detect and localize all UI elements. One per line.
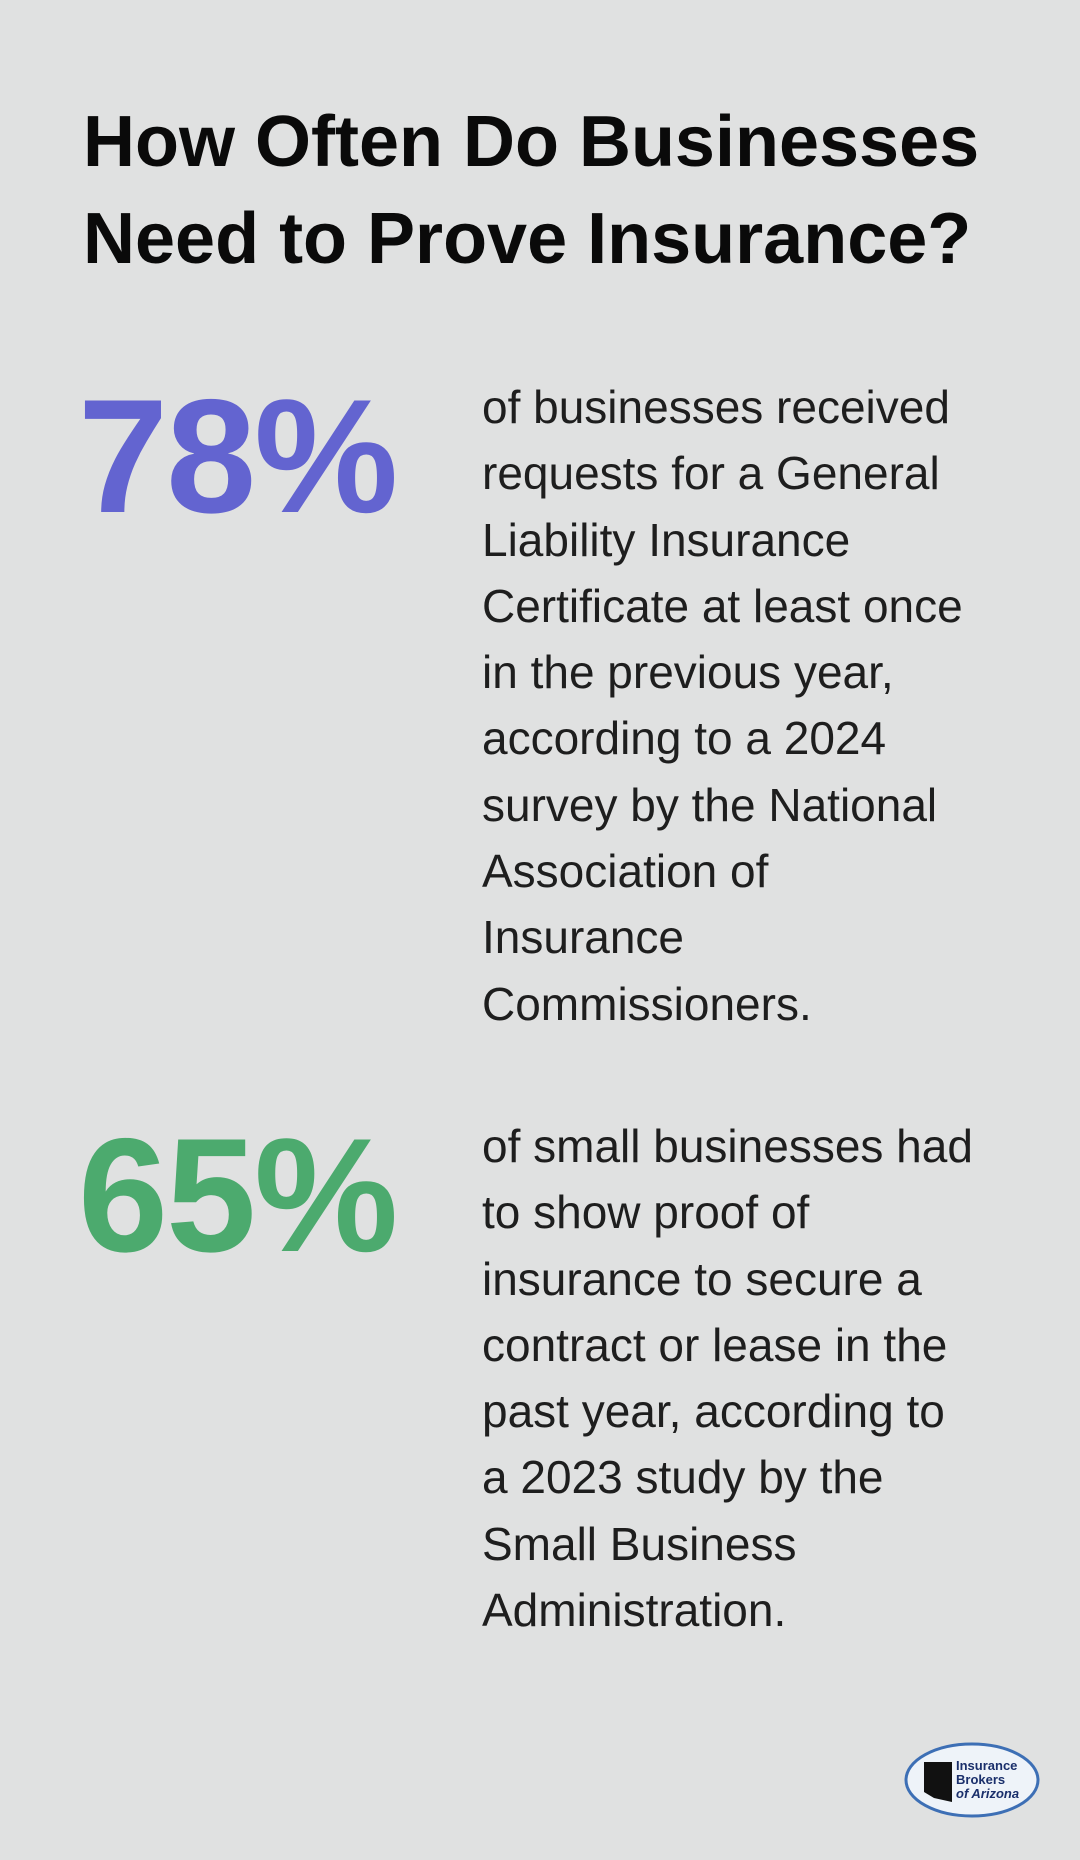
text: 78% description: requests for a General [482, 447, 940, 499]
title [83, 102, 979, 279]
text: 78% description: in the previous year, [482, 646, 894, 698]
stat: 65%: 65% [78, 1105, 396, 1286]
text: 65% description: insurance to secure a [482, 1253, 922, 1305]
logo: Brokers [956, 1772, 1005, 1787]
text: 65% description: of small businesses had [482, 1120, 973, 1172]
stat: 78%: 78% [78, 366, 396, 547]
text: 65% description [482, 1120, 973, 1636]
text: 78% description: survey by the National [482, 779, 937, 831]
text: 78% description: Certificate at least once [482, 580, 963, 632]
text: 65% description: Administration. [482, 1584, 786, 1636]
text: 78% description: of businesses received [482, 381, 950, 433]
text: 65% description: Small Business [482, 1518, 796, 1570]
logo [904, 1742, 1040, 1818]
title: Need to Prove Insurance? [83, 199, 971, 279]
text: 78% description: Association of [482, 845, 768, 897]
text: 78% description: according to a 2024 [482, 712, 886, 764]
logo: Insurance [956, 1758, 1017, 1773]
logo: of Arizona [956, 1786, 1019, 1801]
text: 78% description [482, 381, 963, 1030]
text: 65% description: a 2023 study by the [482, 1451, 884, 1503]
text: 78% description: Liability Insurance [482, 514, 850, 566]
title: How Often Do Businesses [83, 102, 979, 182]
text: 65% description: contract or lease in the [482, 1319, 947, 1371]
text: 65% description: to show proof of [482, 1186, 809, 1238]
text: 78% description: Commissioners. [482, 978, 812, 1030]
text: 65% description: past year, according to [482, 1385, 945, 1437]
text: 78% description: Insurance [482, 911, 684, 963]
